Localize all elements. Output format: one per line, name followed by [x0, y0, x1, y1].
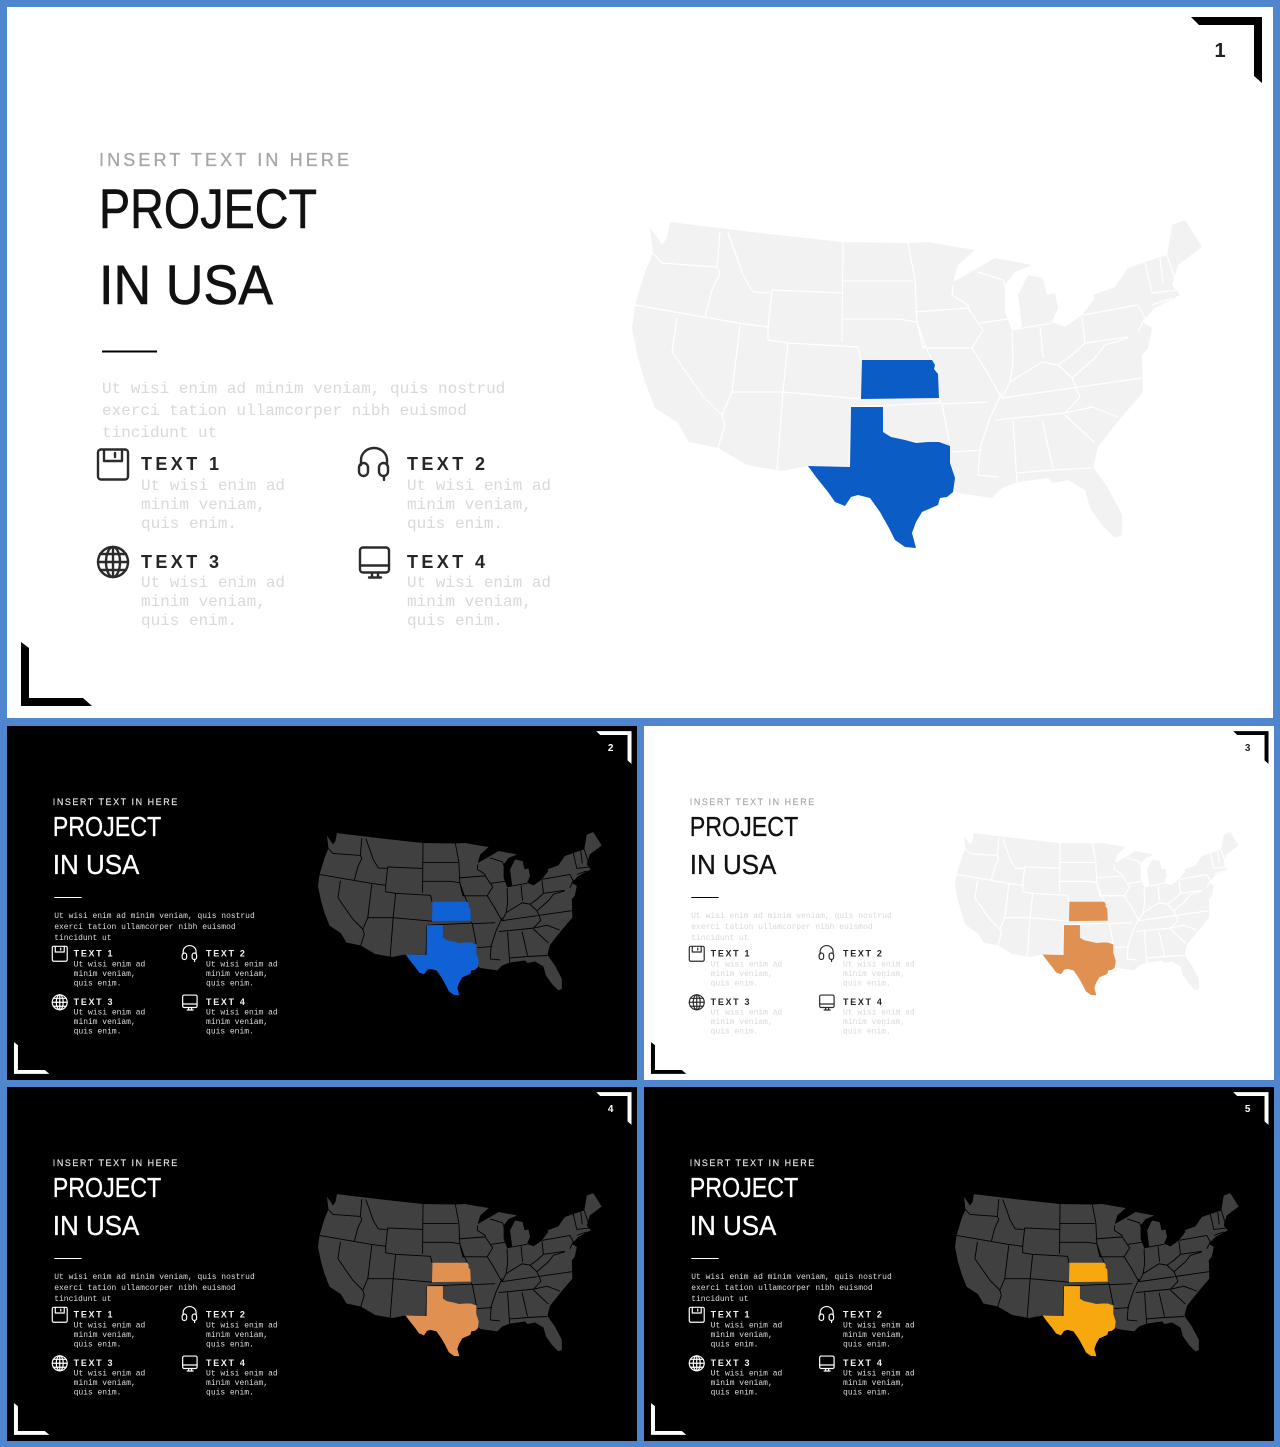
item: text 1: quis enim. — [711, 979, 758, 988]
item: text 1: quis enim. — [74, 1340, 121, 1349]
icon: headset — [182, 1307, 197, 1322]
title line 1: PROJECT — [99, 177, 317, 240]
corner bracket bottom left — [651, 1042, 686, 1074]
panel: slide 2 black with blue states — [7, 726, 637, 1080]
intro paragraph: tincidunt ut — [54, 934, 112, 943]
item: text 3: quis enim. — [74, 1028, 121, 1037]
title line 2: IN USA — [690, 1210, 777, 1241]
item: text 1: TEXT 1 — [711, 1309, 750, 1319]
item: text 1: minim veniam, — [74, 970, 136, 979]
intro paragraph — [691, 1273, 892, 1304]
corner bracket top right — [1233, 1092, 1269, 1125]
icon: floppy disk — [52, 946, 67, 961]
map: USA — [955, 1193, 1239, 1351]
item: text 3: Ut wisi enim ad — [74, 1370, 145, 1379]
item: text 4: quis enim. — [843, 1389, 891, 1398]
item: text 2: TEXT 2 — [206, 1309, 245, 1319]
item: text 2: TEXT 2 — [843, 1309, 882, 1319]
intro paragraph: Ut wisi enim ad minim veniam, quis nostrud — [691, 1273, 892, 1282]
title line 1: PROJECT — [690, 811, 798, 842]
item: text 4: minim veniam, — [206, 1379, 268, 1388]
icon: floppy disk — [689, 946, 704, 961]
item: text 3: quis enim. — [711, 1389, 758, 1398]
item: text 1: Ut wisi enim ad — [74, 1321, 145, 1330]
title line 1: PROJECT — [690, 1172, 798, 1203]
item: text 2: quis enim. — [206, 979, 254, 988]
icon: headset — [819, 946, 834, 961]
item: text 4: quis enim. — [206, 1028, 254, 1037]
item: text 2: minim veniam, — [407, 496, 532, 514]
title line 2: IN USA — [53, 1210, 140, 1241]
intro paragraph — [102, 380, 505, 442]
intro paragraph — [54, 1273, 255, 1304]
item: text 4: minim veniam, — [407, 593, 532, 611]
item: text 2: quis enim. — [843, 979, 891, 988]
item: text 1: Ut wisi enim ad — [74, 960, 145, 969]
map: USA — [318, 1193, 602, 1351]
icon: globe — [52, 1356, 67, 1371]
item: text 3: Ut wisi enim ad — [74, 1009, 145, 1018]
item: text 3 — [141, 552, 285, 630]
item: text 3: minim veniam, — [141, 593, 266, 611]
item: text 1 — [711, 1309, 782, 1349]
item: text 4: minim veniam, — [206, 1018, 268, 1027]
icon: headset — [359, 448, 388, 480]
item: text 3: quis enim. — [141, 612, 237, 630]
item: text 2: Ut wisi enim ad — [206, 1321, 278, 1330]
item: text 1: minim veniam, — [74, 1331, 136, 1340]
item: text 3: TEXT 3 — [711, 997, 750, 1007]
item: text 1: TEXT 1 — [141, 454, 219, 474]
item: text 4 — [407, 552, 551, 630]
icon: floppy disk — [98, 450, 128, 480]
item: text 2 — [206, 1309, 278, 1349]
corner bracket top right — [596, 1092, 632, 1125]
item: text 3: TEXT 3 — [74, 997, 113, 1007]
intro paragraph — [54, 912, 255, 943]
item: text 1: Ut wisi enim ad — [711, 1321, 782, 1330]
item: text 3: minim veniam, — [74, 1018, 136, 1027]
item: text 2: quis enim. — [843, 1340, 891, 1349]
item: text 2: minim veniam, — [843, 970, 905, 979]
corner bracket top right — [1191, 17, 1262, 83]
intro paragraph: exerci tation ullamcorper nibh euismod — [54, 923, 236, 932]
icon: headset — [182, 946, 197, 961]
map: USA — [955, 832, 1239, 990]
item: text 4 — [206, 1358, 278, 1398]
item: text 4: TEXT 4 — [206, 1358, 245, 1368]
map highlight: Kansas and Texas orange — [1043, 902, 1116, 995]
slide number: 1 — [1214, 40, 1226, 62]
item: text 4: quis enim. — [206, 1389, 254, 1398]
slide number: 4 — [608, 1104, 614, 1115]
item: text 2: quis enim. — [206, 1340, 254, 1349]
item: text 2 — [407, 454, 551, 533]
item: text 3: TEXT 3 — [141, 552, 219, 572]
item: text 2: TEXT 2 — [407, 454, 485, 474]
item: text 1: minim veniam, — [711, 1331, 773, 1340]
icon: monitor — [183, 1356, 197, 1371]
icon: globe — [689, 995, 704, 1010]
title line 2: IN USA — [53, 849, 140, 880]
icon: monitor — [820, 1356, 834, 1371]
item: text 4: minim veniam, — [843, 1379, 905, 1388]
map: USA — [318, 832, 602, 990]
item: text 3: minim veniam, — [711, 1018, 773, 1027]
item: text 2: Ut wisi enim ad — [843, 1321, 915, 1330]
corner bracket bottom left — [14, 1042, 49, 1074]
title line 2: IN USA — [690, 849, 777, 880]
eyebrow text: INSERT TEXT IN HERE — [99, 150, 349, 170]
item: text 1 — [74, 948, 145, 988]
intro paragraph: tincidunt ut — [691, 934, 749, 943]
title rule — [691, 897, 719, 899]
item: text 3: minim veniam, — [74, 1379, 136, 1388]
intro paragraph: Ut wisi enim ad minim veniam, quis nostrud — [54, 912, 255, 921]
item: text 4: Ut wisi enim ad — [407, 574, 551, 592]
item: text 4 — [843, 997, 915, 1037]
slide number: 5 — [1245, 1104, 1251, 1115]
intro paragraph: Ut wisi enim ad minim veniam, quis nostrud — [102, 380, 505, 398]
map highlight: Kansas and Texas yellow — [1043, 1263, 1116, 1356]
map highlight: Kansas and Texas blue — [808, 360, 955, 548]
item: text 1: quis enim. — [74, 979, 121, 988]
item: text 1: Ut wisi enim ad — [141, 477, 285, 495]
item: text 2: Ut wisi enim ad — [206, 960, 278, 969]
item: text 1: TEXT 1 — [711, 948, 750, 958]
item: text 1 — [711, 948, 782, 988]
item: text 3: TEXT 3 — [711, 1358, 750, 1368]
title rule — [102, 350, 157, 352]
eyebrow text: INSERT TEXT IN HERE — [53, 1158, 177, 1168]
title rule — [54, 1258, 82, 1260]
item: text 4: Ut wisi enim ad — [843, 1009, 915, 1018]
intro paragraph: tincidunt ut — [54, 1295, 112, 1304]
item: text 4: TEXT 4 — [843, 997, 882, 1007]
map highlight: Kansas and Texas blue — [406, 902, 479, 995]
intro paragraph: Ut wisi enim ad minim veniam, quis nostrud — [54, 1273, 255, 1282]
panel: slide 3 white with orange states — [644, 726, 1274, 1080]
item: text 3 — [711, 1358, 782, 1398]
eyebrow text: INSERT TEXT IN HERE — [53, 797, 177, 807]
map highlight: Kansas and Texas orange — [406, 1263, 479, 1356]
item: text 3: quis enim. — [74, 1389, 121, 1398]
item: text 3: Ut wisi enim ad — [711, 1009, 782, 1018]
panel: slide 5 black with yellow states — [644, 1087, 1274, 1441]
title line 2: IN USA — [99, 253, 274, 316]
title rule — [54, 897, 82, 899]
item: text 1: TEXT 1 — [74, 948, 113, 958]
item: text 1: Ut wisi enim ad — [711, 960, 782, 969]
item: text 2 — [843, 1309, 915, 1349]
item: text 3: Ut wisi enim ad — [711, 1370, 782, 1379]
eyebrow text: INSERT TEXT IN HERE — [690, 1158, 814, 1168]
item: text 4: Ut wisi enim ad — [843, 1370, 915, 1379]
panel: slide 1 white large — [7, 7, 1273, 718]
corner bracket bottom left — [651, 1403, 686, 1435]
item: text 4: Ut wisi enim ad — [206, 1370, 278, 1379]
icon: monitor — [183, 995, 197, 1010]
slide number: 3 — [1245, 743, 1251, 754]
item: text 1: quis enim. — [711, 1340, 758, 1349]
item: text 2: Ut wisi enim ad — [843, 960, 915, 969]
intro paragraph: exerci tation ullamcorper nibh euismod — [54, 1284, 236, 1293]
icon: floppy disk — [689, 1307, 704, 1322]
intro paragraph: exerci tation ullamcorper nibh euismod — [691, 1284, 873, 1293]
icon: floppy disk — [52, 1307, 67, 1322]
corner bracket top right — [1233, 731, 1269, 764]
intro paragraph: tincidunt ut — [691, 1295, 749, 1304]
eyebrow text: INSERT TEXT IN HERE — [690, 797, 814, 807]
intro paragraph — [691, 912, 892, 943]
item: text 4: TEXT 4 — [206, 997, 245, 1007]
item: text 2: TEXT 2 — [206, 948, 245, 958]
icon: headset — [819, 1307, 834, 1322]
icon: monitor — [820, 995, 834, 1010]
icon: globe — [52, 995, 67, 1010]
item: text 3 — [74, 997, 145, 1037]
item: text 3 — [711, 997, 782, 1037]
item: text 3: quis enim. — [711, 1028, 758, 1037]
item: text 2: Ut wisi enim ad — [407, 477, 551, 495]
intro paragraph: Ut wisi enim ad minim veniam, quis nostrud — [691, 912, 892, 921]
item: text 3: Ut wisi enim ad — [141, 574, 285, 592]
map: USA — [632, 220, 1202, 538]
item: text 2: TEXT 2 — [843, 948, 882, 958]
item: text 1: minim veniam, — [711, 970, 773, 979]
panel: slide 4 black with orange states — [7, 1087, 637, 1441]
item: text 2: quis enim. — [407, 515, 503, 533]
item: text 2 — [206, 948, 278, 988]
item: text 4: Ut wisi enim ad — [206, 1009, 278, 1018]
item: text 1 — [141, 454, 285, 533]
intro paragraph: exerci tation ullamcorper nibh euismod — [102, 402, 467, 420]
intro paragraph: exerci tation ullamcorper nibh euismod — [691, 923, 873, 932]
item: text 2: minim veniam, — [843, 1331, 905, 1340]
icon: globe — [689, 1356, 704, 1371]
item: text 3 — [74, 1358, 145, 1398]
corner bracket top right — [596, 731, 632, 764]
corner bracket bottom left — [14, 1403, 49, 1435]
title rule — [691, 1258, 719, 1260]
item: text 4: TEXT 4 — [407, 552, 485, 572]
item: text 1: minim veniam, — [141, 496, 266, 514]
item: text 1: quis enim. — [141, 515, 237, 533]
item: text 4: TEXT 4 — [843, 1358, 882, 1368]
intro paragraph: tincidunt ut — [102, 424, 217, 442]
icon: globe — [98, 547, 128, 577]
item: text 2: minim veniam, — [206, 970, 268, 979]
corner bracket bottom left — [21, 642, 92, 706]
icon: monitor — [360, 548, 389, 578]
item: text 4 — [206, 997, 278, 1037]
item: text 1: TEXT 1 — [74, 1309, 113, 1319]
item: text 4: quis enim. — [407, 612, 503, 630]
title line 1: PROJECT — [53, 1172, 161, 1203]
item: text 4: quis enim. — [843, 1028, 891, 1037]
item: text 4: minim veniam, — [843, 1018, 905, 1027]
title line 1: PROJECT — [53, 811, 161, 842]
item: text 2 — [843, 948, 915, 988]
item: text 2: minim veniam, — [206, 1331, 268, 1340]
slide number: 2 — [608, 743, 614, 754]
item: text 4 — [843, 1358, 915, 1398]
item: text 3: TEXT 3 — [74, 1358, 113, 1368]
item: text 1 — [74, 1309, 145, 1349]
item: text 3: minim veniam, — [711, 1379, 773, 1388]
